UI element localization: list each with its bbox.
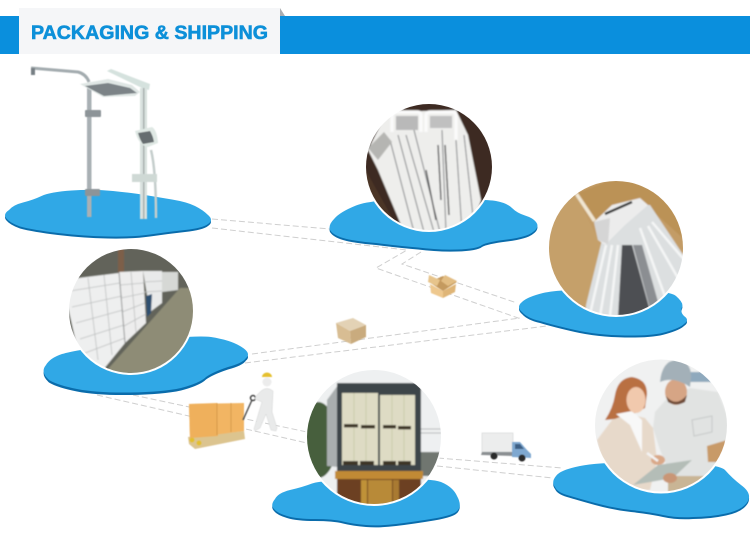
hanger fan <box>585 205 690 320</box>
left pole <box>87 88 92 217</box>
building <box>421 452 441 476</box>
courier face <box>665 379 687 405</box>
icon: worker with pallet jack <box>243 372 277 431</box>
photo: hangers in cardboard box <box>549 181 683 317</box>
icon: pallet of boxes <box>188 403 245 449</box>
container panels <box>342 393 378 465</box>
woman jacket <box>597 414 657 490</box>
clipboard <box>633 460 692 485</box>
header band <box>0 8 750 54</box>
woman hair <box>605 377 647 420</box>
photo: white hangers on dark background <box>366 104 492 232</box>
hand <box>651 455 665 465</box>
dashed route lines <box>97 219 562 478</box>
hanger bundle <box>368 110 481 232</box>
icon: delivery truck <box>481 433 531 462</box>
hand shower <box>135 127 158 147</box>
cloud platform 2 <box>330 199 537 252</box>
trailer <box>335 471 423 479</box>
top bracket <box>107 69 150 90</box>
courier cap <box>660 360 691 387</box>
right pole <box>140 88 147 219</box>
shower arm <box>31 68 89 82</box>
cloud platform 6 <box>553 462 749 519</box>
woman face <box>626 387 646 413</box>
title: PACKAGING & SHIPPING <box>31 22 268 44</box>
boxes <box>189 403 244 438</box>
cloud platform 4 <box>44 337 248 395</box>
cloud platform 3 <box>519 289 687 338</box>
container side <box>327 385 338 467</box>
photo: loaded shipping container <box>299 367 443 509</box>
holder <box>132 174 157 182</box>
parcel <box>707 440 727 462</box>
rain head <box>80 79 140 97</box>
pallet <box>188 431 245 449</box>
photo: warehouse with stacked white boxes <box>69 249 193 375</box>
icon: open cardboard box <box>428 275 457 298</box>
icon: shower set <box>31 68 158 219</box>
courier trousers <box>667 475 704 492</box>
icon: closed cardboard box <box>336 318 366 344</box>
cloud platform 5 <box>272 479 460 527</box>
cloud platform 1 <box>5 190 211 239</box>
tree <box>307 401 332 478</box>
courier shirt <box>653 388 728 478</box>
container frame <box>337 383 421 471</box>
photo: courier and customer with clipboard <box>593 357 730 496</box>
